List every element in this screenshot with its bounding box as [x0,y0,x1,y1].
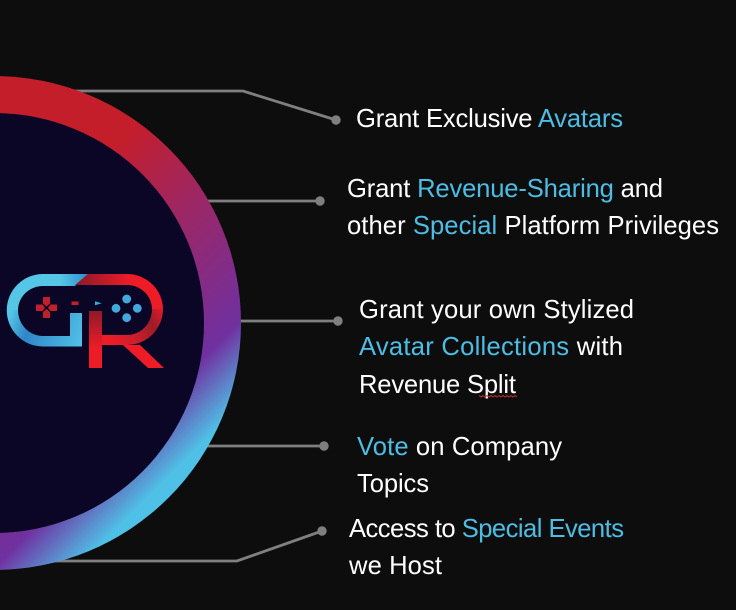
connector: vote [200,441,329,451]
text: avatar collections: Grant your own Stylized [359,296,634,324]
logo letter G [7,274,88,346]
logo action buttons [112,295,142,322]
text: exclusive avatars: Grant Exclusive Avatars [356,105,623,133]
connector: avatar collections [235,316,343,326]
text: special events: Access to Special Events [349,515,624,543]
logo letter R [75,274,164,368]
text: revenue sharing: other Special Platform Privileges [347,212,719,240]
logo select button [72,302,78,305]
connector lines [50,91,343,561]
text: revenue sharing: Grant Revenue-Sharing and [347,175,663,203]
text: avatar collections: Avatar Collections with [359,333,623,361]
text: avatar collections: Revenue Split [359,371,516,399]
text: revenue sharing [347,175,719,240]
connector: avatars [70,91,341,125]
connector: revenue sharing [200,196,325,206]
gradient ring with inner circle [0,76,241,570]
text: special events: we Host [348,552,442,580]
logo start button [95,301,102,305]
text: special events [348,515,624,580]
connector: special events [50,526,327,561]
text: avatar collections [359,296,634,399]
text: vote: Vote on Company [357,433,562,461]
logo: GR game controller [7,274,164,368]
logo d-pad [36,297,57,318]
text: vote [357,433,562,498]
text: vote: Topics [357,470,429,498]
